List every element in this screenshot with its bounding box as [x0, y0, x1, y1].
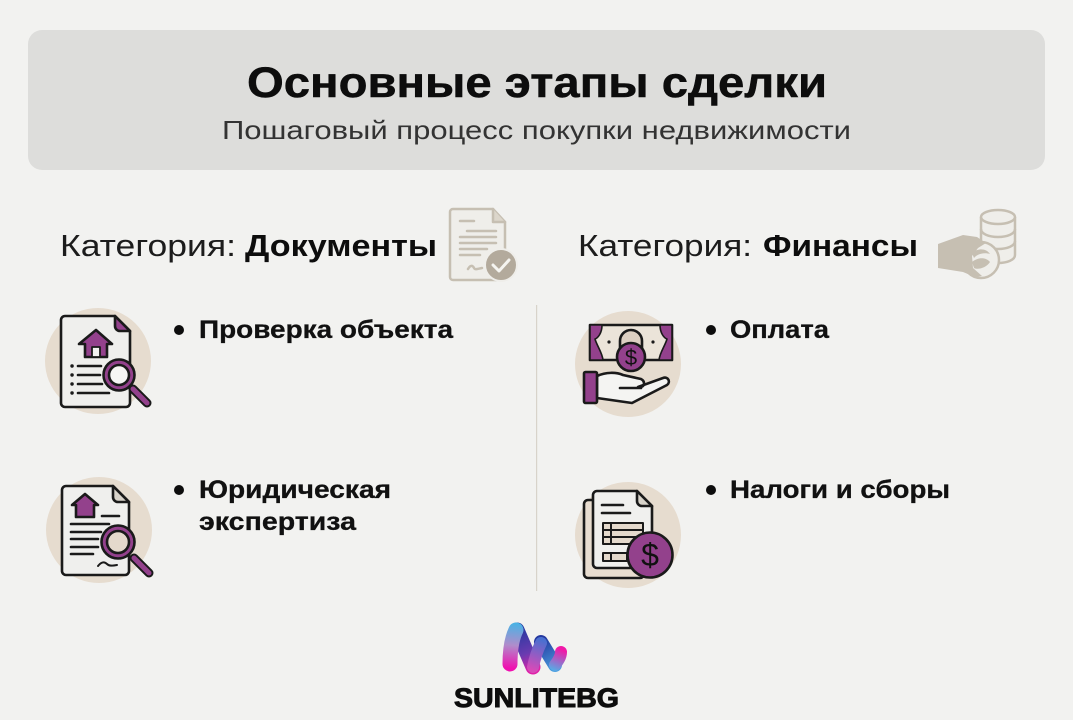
icon: tax papers with dollar coin — [575, 482, 681, 588]
brand name: SUNLITEBG — [454, 683, 619, 713]
icon: legal document with magnifier — [46, 477, 152, 583]
icon: property document with magnifier — [45, 308, 151, 414]
bullet — [706, 325, 716, 335]
step: property check — [45, 308, 454, 414]
step: legal review — [46, 476, 391, 583]
label: экспертиза — [199, 508, 357, 536]
icon: tax papers with dollar coin: $ — [641, 537, 659, 573]
bullet — [174, 485, 184, 495]
logo — [454, 630, 619, 713]
category heading: finance: Финансы — [763, 228, 918, 263]
label: Юридическая — [199, 476, 391, 504]
title: Основные этапы сделки — [247, 59, 827, 107]
bullet — [706, 485, 716, 495]
label: Оплата — [730, 316, 830, 344]
icon: hand with coins — [938, 210, 1015, 278]
label: Налоги и сборы — [730, 476, 950, 504]
category heading: documents: Категория: — [60, 228, 236, 263]
logo mark: ribbon — [510, 630, 561, 667]
label: Проверка объекта — [199, 316, 454, 344]
icon: banknote over open hand — [575, 311, 681, 417]
icon: certified document — [450, 209, 517, 281]
bullet — [174, 325, 184, 335]
subtitle: Пошаговый процесс покупки недвижимости — [222, 115, 851, 145]
header panel — [28, 30, 1045, 170]
step: taxes and fees — [575, 476, 950, 588]
step: payment — [575, 311, 830, 417]
divider — [536, 305, 537, 591]
category heading: documents: Документы — [245, 228, 437, 263]
category heading: finance: Категория: — [578, 228, 752, 263]
icon: banknote over open hand: $ — [625, 345, 637, 370]
